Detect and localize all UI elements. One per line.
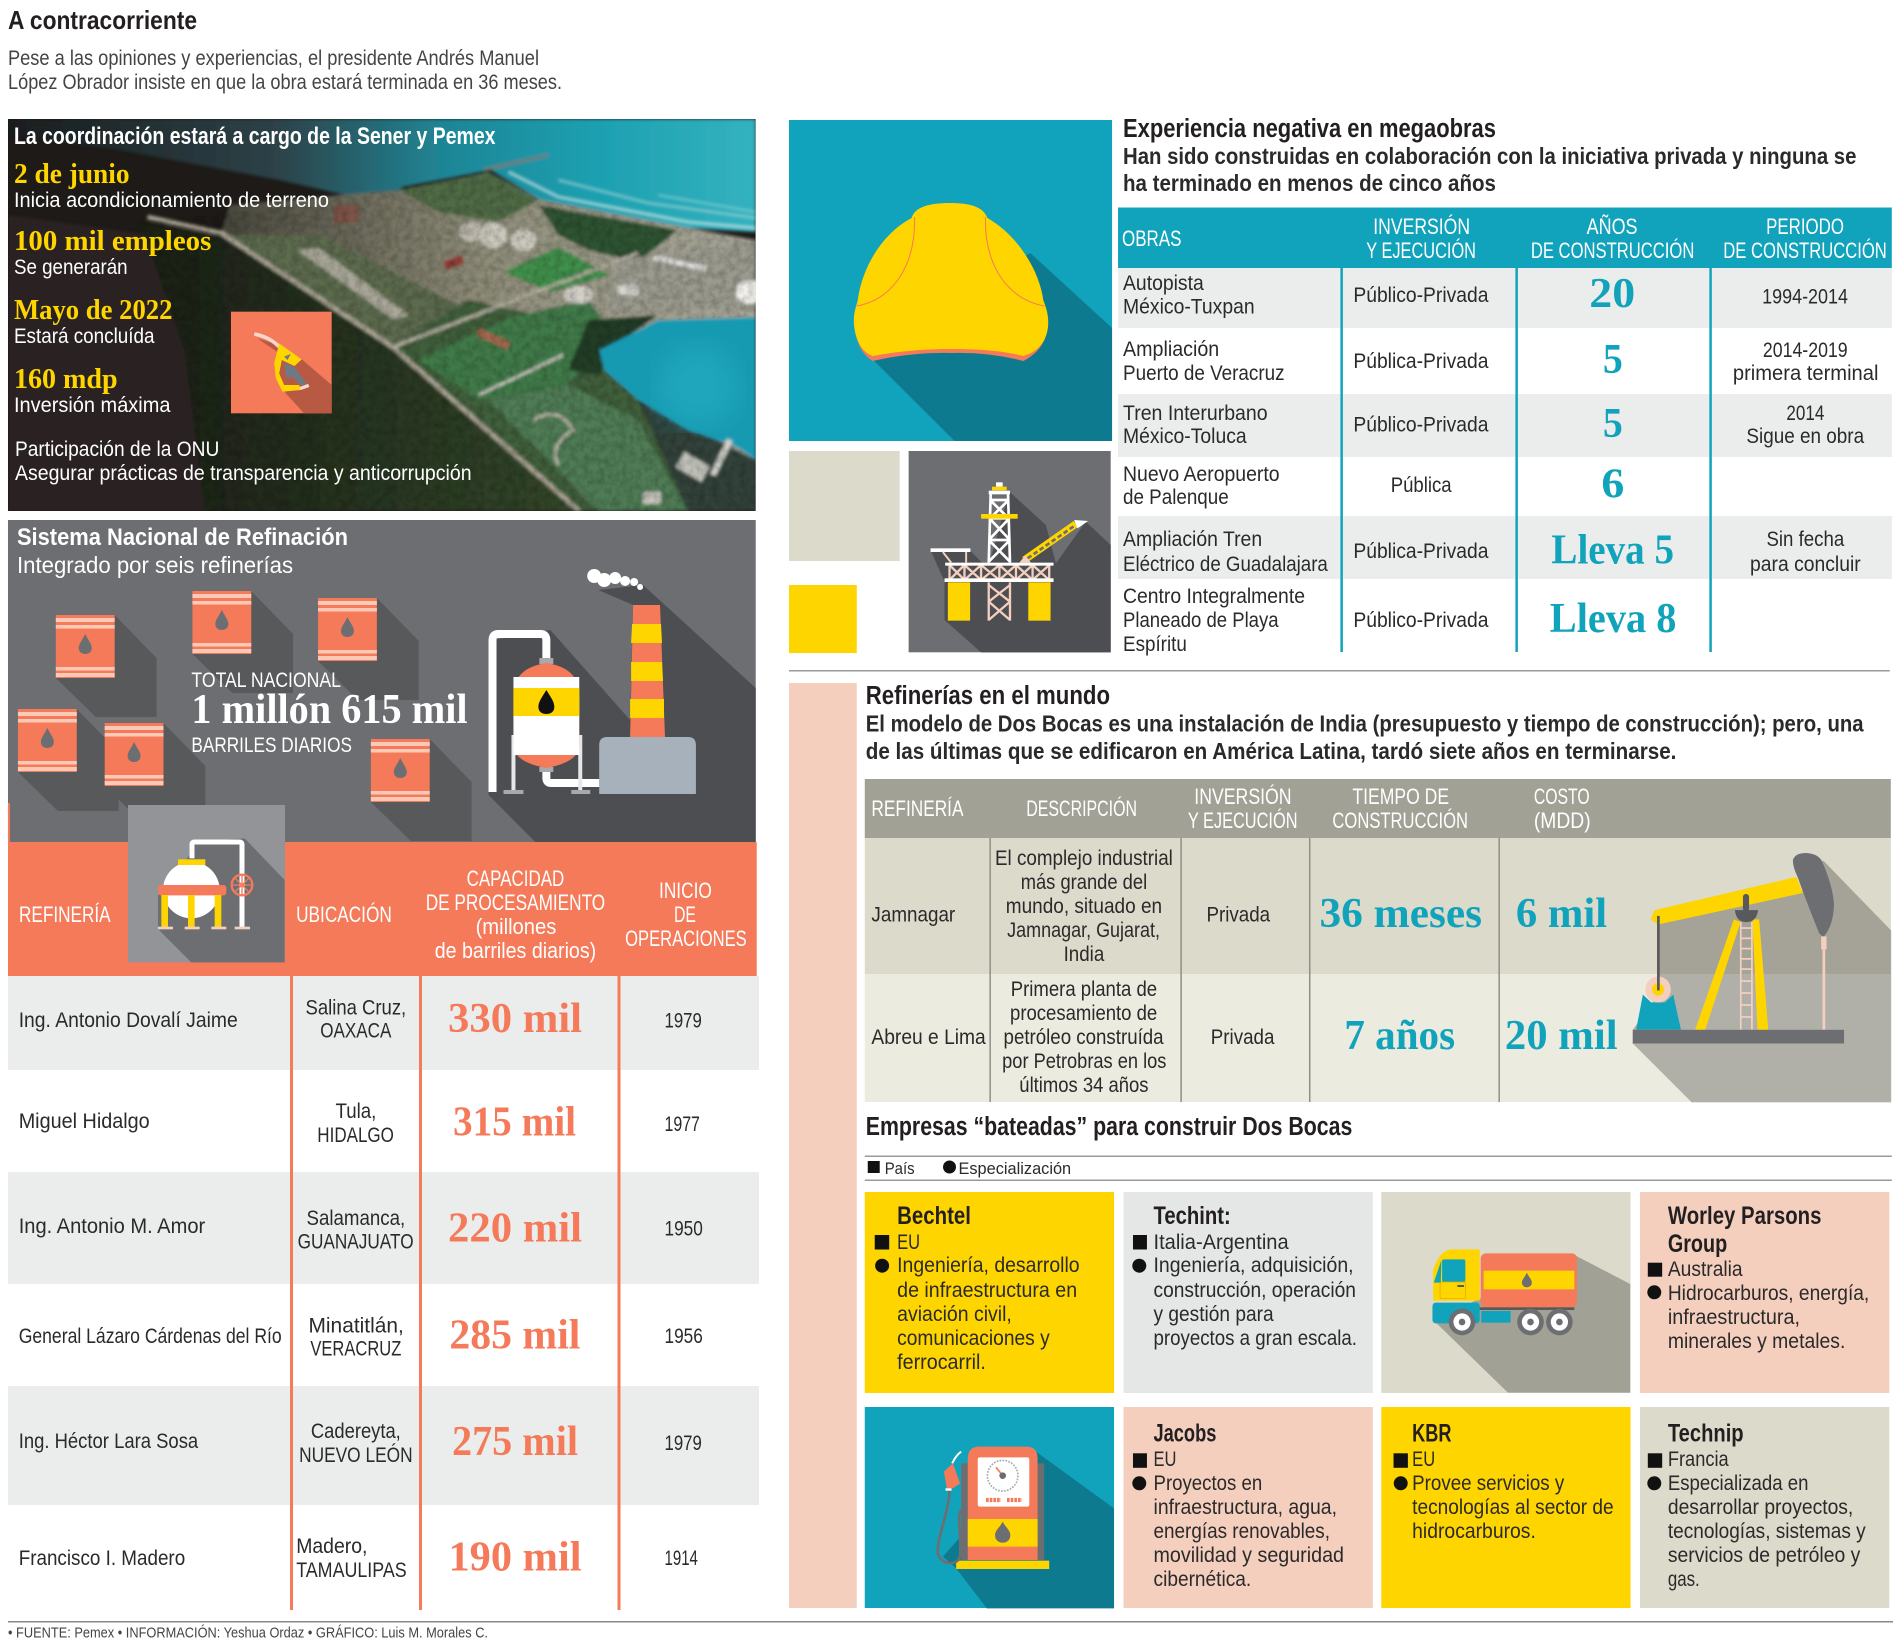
row: Antonio M. Amor: Ing. Antonio M. Amor [19, 1215, 205, 1238]
card: Technip: tecnologías, sistemas y [1668, 1520, 1866, 1543]
intro text: López Obrador insiste en que la obra estará terminada en 36 meses. [8, 71, 562, 94]
card: Techint: proyectos a gran escala. [1154, 1327, 1357, 1350]
row: Jamnagar: más grande del [1021, 871, 1147, 894]
row: Puerto de Veracruz: Ampliación [1123, 338, 1219, 361]
card: Technip [1640, 1407, 1889, 1608]
row: Jamnagar: 6 mil [1516, 891, 1607, 937]
legend: País [885, 1159, 915, 1178]
fact: investment [14, 363, 171, 417]
card: KBR: EU [1412, 1448, 1435, 1471]
table header: DESCRIPCIÓN [1026, 796, 1137, 821]
section heading: Empresas “bateadas” para construir Dos Bocas [866, 1111, 1352, 1141]
row: Jamnagar: Privada [1206, 904, 1270, 927]
row: Puerto de Veracruz: primera terminal [1733, 362, 1878, 385]
fact: UN participation [15, 438, 472, 485]
row: Jamnagar: 36 meses [1319, 891, 1482, 937]
row: Abreu e Lima: últimos 34 años [1019, 1074, 1149, 1097]
row: Abreu e Lima: Abreu e Lima [871, 1026, 986, 1049]
card: Techint: Italia-Argentina [1154, 1231, 1289, 1254]
row: Miguel Hidalgo: Tula, [336, 1100, 376, 1123]
national total: BARRILES DIARIOS [191, 734, 352, 757]
row: Tren Eléctrico de Guadalajara [1123, 528, 1861, 576]
row: Tren Interurbano: Tren Interurbano [1123, 402, 1268, 425]
section subheading [1123, 143, 1856, 196]
row: Centro de Playa Espíritu [1123, 585, 1676, 656]
row: Antonio Dovalí Jaime: Salina Cruz, [306, 997, 406, 1020]
row: Aeropuerto de Palenque: Pública [1391, 474, 1452, 497]
photo heading: La coordinación estará a cargo de la Sener y Pemex [14, 123, 496, 150]
table header: PERIODO [1766, 214, 1844, 239]
fact: start date [14, 158, 329, 212]
icon: tanker truck [1381, 1192, 1631, 1393]
footer credits: • FUENTE: Pemex • INFORMACIÓN: Yeshua Ordaz • GRÁFICO: Luis M. Morales C. [8, 1625, 488, 1642]
national total: 1 millón 615 mil [191, 687, 468, 733]
section: Experiencia negativa en megaobras [1118, 113, 1892, 656]
panel: Sistema Nacional de Refinación [8, 520, 756, 842]
section heading: Refinerías en el mundo [866, 680, 1110, 710]
fact: completion: Mayo de 2022 [14, 294, 172, 326]
row: Lázaro Cárdenas: Minatitlán, [308, 1314, 404, 1338]
row: Centro de Playa Espíritu: Centro Integralmente [1123, 585, 1305, 608]
icon: fuel nozzle [231, 312, 332, 413]
row: Tren Interurbano: 5 [1603, 401, 1623, 447]
row: Centro de Playa Espíritu: Espíritu [1123, 633, 1187, 656]
decorative pink column [789, 683, 857, 1608]
row: Abreu e Lima [871, 978, 1618, 1097]
card: Jacobs: cibernética. [1154, 1568, 1251, 1591]
aerial photo of Dos Bocas [8, 119, 764, 511]
row: Tren Interurbano: Sigue en obra [1746, 425, 1864, 448]
row: Tren Eléctrico de Guadalajara: Lleva 5 [1551, 528, 1674, 574]
card: KBR: hidrocarburos. [1412, 1520, 1536, 1543]
card: KBR [1381, 1407, 1631, 1608]
national total: TOTAL NACIONAL [191, 669, 341, 692]
decorative tan square [789, 451, 900, 561]
table header: AÑOS [1587, 214, 1638, 239]
row: Lázaro Cárdenas: VERACRUZ [310, 1338, 401, 1361]
icon: fuel pump [865, 1407, 1114, 1608]
intro text [8, 47, 562, 94]
row: Tren Eléctrico de Guadalajara: para concluir [1750, 553, 1861, 576]
card: Bechtel: aviación civil, [897, 1303, 1012, 1326]
card: Worley Parsons: Group [1668, 1230, 1727, 1258]
card: Worley Parsons: Hidrocarburos, energía, [1668, 1282, 1869, 1305]
table header: COSTO [1534, 784, 1590, 809]
row: Centro de Playa Espíritu: Público-Privada [1353, 609, 1489, 632]
table header [8, 803, 757, 976]
intro text: Pese a las opiniones y experiencias, el presidente Andrés Manuel [8, 47, 539, 70]
fact: completion [14, 294, 172, 348]
row: Autopista México-Tuxpan: Público-Privada [1353, 284, 1489, 307]
fact: completion: Estará concluída [14, 325, 155, 348]
row: Jamnagar: mundo, situado en [1006, 895, 1162, 918]
row: Héctor Lara Sosa: Cadereyta, [311, 1420, 401, 1443]
table header: REFINERÍA [19, 902, 111, 927]
card: Jacobs: Proyectos en [1154, 1472, 1262, 1495]
table header: INICIO [659, 878, 712, 903]
card: Jacobs: movilidad y seguridad [1154, 1544, 1344, 1567]
row: Miguel Hidalgo: HIDALGO [317, 1124, 394, 1147]
table header [865, 779, 1891, 838]
row: Héctor Lara Sosa: Ing. Héctor Lara Sosa [19, 1430, 198, 1453]
card: Technip: Especializada en [1668, 1472, 1808, 1495]
row: Autopista México-Tuxpan: 20 [1589, 271, 1635, 317]
card: Jacobs: energías renovables, [1154, 1520, 1330, 1543]
card: KBR: KBR [1412, 1420, 1451, 1448]
icon: oil pumpjack [1633, 853, 1891, 1102]
row: Antonio M. Amor [19, 1206, 703, 1254]
table header: INVERSIÓN [1194, 784, 1292, 809]
row: Jamnagar: El complejo industrial [995, 847, 1173, 870]
panel: coordination photo [8, 119, 764, 511]
fact: UN participation: Participación de la ONU [15, 438, 219, 461]
table header: UBICACIÓN [296, 902, 392, 927]
section: Refinerías en el mundo [865, 680, 1891, 1102]
card: Bechtel: EU [897, 1231, 920, 1254]
fact: investment: 160 mdp [14, 363, 118, 395]
card: Jacobs [1124, 1407, 1373, 1608]
row: Francisco I. Madero: Madero, [296, 1535, 367, 1558]
row: Centro de Playa Espíritu: Lleva 8 [1550, 596, 1676, 642]
card: Jacobs: Jacobs [1154, 1420, 1216, 1448]
row: Abreu e Lima: procesamiento de [1010, 1002, 1157, 1025]
legend [868, 1159, 1071, 1178]
row: Tren Eléctrico de Guadalajara: Pública-Privada [1353, 540, 1489, 563]
row: Antonio Dovalí Jaime: 330 mil [448, 996, 582, 1042]
card: Technip: gas. [1668, 1568, 1700, 1591]
icon: refinery [493, 569, 696, 794]
row: Francisco I. Madero: TAMAULIPAS [296, 1559, 407, 1582]
section heading: Experiencia negativa en megaobras [1123, 113, 1496, 143]
card: Bechtel [865, 1192, 1114, 1393]
row: Puerto de Veracruz: 5 [1603, 337, 1623, 383]
row: Abreu e Lima: petróleo construída [1004, 1026, 1164, 1049]
card: Bechtel: ferrocarril. [897, 1351, 986, 1374]
row: Miguel Hidalgo [19, 1100, 700, 1147]
section: Empresas bateadas [865, 1111, 1892, 1608]
card: Jacobs: EU [1154, 1448, 1176, 1471]
card: Worley Parsons: minerales y metales. [1668, 1330, 1845, 1353]
table rows background [1118, 268, 1892, 652]
row: Héctor Lara Sosa: 275 mil [452, 1419, 578, 1465]
table header: DE CONSTRUCCIÓN [1531, 238, 1694, 263]
fact: investment: Inversión máxima [14, 394, 171, 417]
row: Héctor Lara Sosa [19, 1419, 702, 1467]
table rows [8, 976, 759, 1610]
row: Abreu e Lima: Privada [1211, 1026, 1275, 1049]
row: Jamnagar: Jamnagar, Gujarat, [1007, 919, 1160, 942]
card: Worley Parsons [1640, 1192, 1889, 1393]
card: Bechtel: de infraestructura en [897, 1279, 1077, 1302]
table header: TIEMPO DE [1352, 784, 1449, 809]
card: Technip: servicios de petróleo y [1668, 1544, 1861, 1567]
row: Jamnagar: India [1064, 943, 1105, 966]
panel subheading: Integrado por seis refinerías [17, 552, 293, 578]
row: Tren Interurbano: 2014 [1786, 402, 1825, 425]
table header: (MDD) [1534, 808, 1591, 833]
row: Tren Interurbano [1123, 401, 1864, 448]
row: Tren Interurbano: México-Toluca [1123, 425, 1247, 448]
card: Worley Parsons: Worley Parsons [1668, 1202, 1821, 1230]
right column [789, 113, 1892, 1608]
table header: DE PROCESAMIENTO [426, 890, 605, 915]
row: Autopista México-Tuxpan: Autopista [1123, 272, 1204, 295]
legend: Especialización [958, 1159, 1071, 1178]
row: Francisco I. Madero: 190 mil [448, 1534, 582, 1580]
table header: CONSTRUCCIÓN [1332, 808, 1468, 833]
national total [191, 669, 468, 757]
section subheading [866, 711, 1864, 764]
panel heading: Sistema Nacional de Refinación [17, 524, 348, 551]
fact: UN participation: Asegurar prácticas de transparencia y anticorrupción [15, 462, 472, 485]
row: Autopista México-Tuxpan [1123, 271, 1848, 319]
row: Miguel Hidalgo: 315 mil [453, 1100, 576, 1146]
row: Antonio M. Amor: 1950 [664, 1218, 703, 1240]
card: Technip: desarrollar proyectos, [1668, 1496, 1853, 1519]
row: Autopista México-Tuxpan: México-Tuxpan [1123, 296, 1255, 319]
row: Francisco I. Madero: Francisco I. Madero [19, 1547, 185, 1570]
row: Aeropuerto de Palenque: Nuevo Aeropuerto [1123, 463, 1280, 486]
fact: jobs: 100 mil empleos [14, 225, 211, 257]
row: Abreu e Lima: por Petrobras en los [1002, 1050, 1166, 1073]
row: Miguel Hidalgo: 1977 [664, 1113, 700, 1136]
card: Jacobs: infraestructura, agua, [1154, 1496, 1337, 1519]
row: Aeropuerto de Palenque [1123, 461, 1624, 509]
card: Technip: Technip [1668, 1420, 1744, 1448]
row: Abreu e Lima: 7 años [1344, 1013, 1455, 1059]
card: Techint: Techint: [1154, 1202, 1231, 1230]
card: Techint: y gestión para [1154, 1303, 1274, 1326]
table rows background [865, 838, 1891, 1102]
icon: hard hat [789, 120, 1112, 441]
row: Antonio Dovalí Jaime [19, 996, 702, 1043]
table header: OPERACIONES [625, 926, 747, 951]
icons: oil barrels [18, 591, 472, 841]
card: KBR: tecnologías al sector de [1412, 1496, 1614, 1519]
table header: INVERSIÓN [1373, 214, 1470, 239]
row: Tren Eléctrico de Guadalajara: Sin fecha [1766, 528, 1845, 551]
row: Tren Eléctrico de Guadalajara: Ampliación Tren [1123, 528, 1262, 551]
table header: OBRAS [1122, 226, 1181, 251]
row: Tren Eléctrico de Guadalajara: Eléctrico de Guadalajara [1123, 553, 1328, 576]
row: Tren Interurbano: Público-Privada [1353, 413, 1489, 437]
table header: de barriles diarios) [435, 938, 596, 963]
row: Antonio Dovalí Jaime: OAXACA [320, 1020, 391, 1043]
table header: (millones [476, 914, 556, 939]
panel: refineries table [8, 803, 759, 1610]
refinery shadow [489, 585, 756, 842]
row: Puerto de Veracruz: Puerto de Veracruz [1123, 362, 1285, 385]
row: Antonio M. Amor: 220 mil [448, 1206, 582, 1252]
fact: start date: 2 de junio [14, 158, 130, 190]
card: Techint: Ingeniería, adquisición, [1154, 1254, 1354, 1277]
row: Miguel Hidalgo: Miguel Hidalgo [19, 1110, 150, 1133]
card: Bechtel: Bechtel [897, 1202, 971, 1230]
decorative yellow square [789, 585, 857, 653]
fact: jobs: Se generarán [14, 256, 128, 279]
row: Lázaro Cárdenas [19, 1313, 703, 1361]
row: Jamnagar [871, 847, 1607, 966]
row: Francisco I. Madero [19, 1534, 698, 1582]
row: Lázaro Cárdenas: 1956 [664, 1325, 703, 1348]
title: A contracorriente [8, 5, 197, 35]
row: Puerto de Veracruz [1123, 337, 1878, 385]
table header: DE [674, 902, 696, 927]
fact: jobs [14, 225, 211, 279]
card: Technip: Francia [1668, 1448, 1729, 1471]
row: Antonio M. Amor: Salamanca, [306, 1207, 405, 1230]
table header [1118, 208, 1892, 268]
section subheading: ha terminado en menos de cinco años [1123, 170, 1496, 196]
row: Lázaro Cárdenas: General Lázaro Cárdenas del Río [19, 1325, 282, 1348]
row: Antonio Dovalí Jaime: Ing. Antonio Dovalí Jaime [19, 1009, 238, 1032]
table header: Y EJECUCIÓN [1366, 238, 1476, 263]
card: Techint: construcción, operación [1154, 1279, 1356, 1302]
row: Jamnagar: Jamnagar [871, 904, 955, 927]
row: Autopista México-Tuxpan: 1994-2014 [1762, 285, 1848, 309]
section subheading: de las últimas que se edificaron en América Latina, tardó siete años en terminarse. [866, 738, 1676, 764]
card: Bechtel: comunicaciones y [897, 1327, 1050, 1350]
row: Antonio Dovalí Jaime: 1979 [664, 1010, 702, 1033]
row: Antonio M. Amor: GUANAJUATO [298, 1231, 414, 1254]
table header: CAPACIDAD [467, 866, 564, 891]
row: Héctor Lara Sosa: NUEVO LEÓN [299, 1444, 413, 1467]
row: Francisco I. Madero: 1914 [664, 1547, 698, 1570]
row: Centro de Playa Espíritu: Planeado de Playa [1123, 609, 1279, 632]
row: Puerto de Veracruz: 2014-2019 [1763, 339, 1848, 362]
card: Techint [1124, 1192, 1373, 1393]
row: Abreu e Lima: 20 mil [1505, 1013, 1618, 1059]
row: Aeropuerto de Palenque: 6 [1601, 461, 1624, 508]
card: KBR: Provee servicios y [1412, 1472, 1565, 1495]
icon: gas tank [128, 805, 285, 962]
row: Héctor Lara Sosa: 1979 [664, 1432, 702, 1455]
table header: REFINERÍA [871, 796, 964, 821]
icon: oil rig [909, 451, 1111, 652]
card: Worley Parsons: infraestructura, [1668, 1306, 1800, 1329]
card: Worley Parsons: Australia [1668, 1258, 1743, 1281]
row: Lázaro Cárdenas: 285 mil [449, 1313, 580, 1359]
row: Puerto de Veracruz: Pública-Privada [1353, 350, 1489, 373]
row: Aeropuerto de Palenque: de Palenque [1123, 486, 1229, 509]
table header: Y EJECUCIÓN [1188, 808, 1298, 833]
card: Bechtel: Ingeniería, desarrollo [897, 1254, 1080, 1277]
fact: start date: Inicia acondicionamiento de terreno [14, 189, 329, 212]
row: Abreu e Lima: Primera planta de [1011, 978, 1157, 1001]
